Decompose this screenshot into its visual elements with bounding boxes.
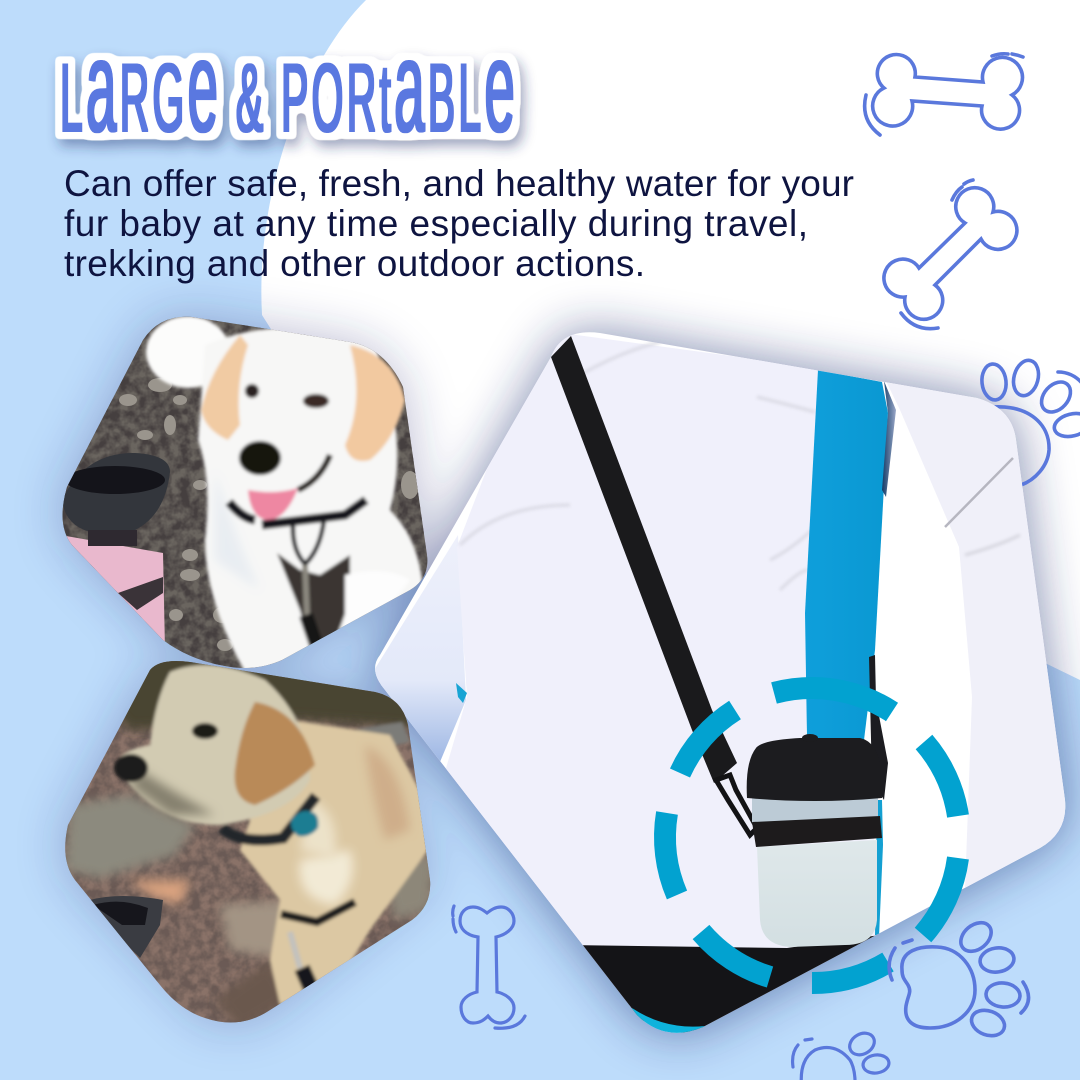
dog nose and eye (114, 754, 148, 782)
shirt folds (460, 342, 815, 590)
photo: golden retriever outdoors (50, 650, 440, 1035)
dark gap between legs (277, 553, 350, 655)
icon: bone top right (865, 54, 1023, 135)
puppy face (245, 384, 259, 398)
dog head (115, 665, 310, 825)
body text: trekking and other outdoor actions. (64, 243, 645, 284)
body text: Can offer safe, fresh, and healthy water for your (64, 163, 854, 204)
collar and tag (222, 796, 316, 840)
puppy shading (216, 496, 252, 580)
title: LaRGe & PORtaBLe (60, 15, 518, 160)
harness (229, 500, 366, 525)
strap (551, 336, 737, 783)
icon: paw bottom edge (793, 1029, 890, 1080)
shadows behind photos (63, 317, 1065, 1033)
icon: paw top right (980, 358, 1080, 485)
pants (582, 936, 876, 1033)
blue panel (805, 370, 888, 740)
carabiner (716, 775, 757, 835)
icon: tilted bone (884, 180, 1017, 329)
dog body (240, 720, 428, 1005)
icon: paw lower right (889, 917, 1029, 1040)
photo: main product on model (368, 325, 1080, 1045)
shirt (436, 330, 878, 950)
water bottle bowl (62, 453, 170, 532)
forest (120, 661, 409, 736)
body text: fur baby at any time especially during travel, (64, 203, 808, 244)
bottle (757, 840, 877, 947)
dog ear (235, 702, 315, 805)
rocks (65, 795, 195, 878)
icon: upright bone (453, 906, 525, 1028)
right sleeve (886, 381, 1075, 890)
puppy body (146, 316, 230, 388)
body text (64, 163, 854, 284)
bowl (90, 896, 163, 958)
photo: white puppy with bottle (50, 310, 440, 675)
left arm (375, 536, 466, 762)
gravel stones (119, 378, 419, 651)
puppy ears (201, 335, 248, 440)
dashed highlight circle (665, 688, 958, 983)
